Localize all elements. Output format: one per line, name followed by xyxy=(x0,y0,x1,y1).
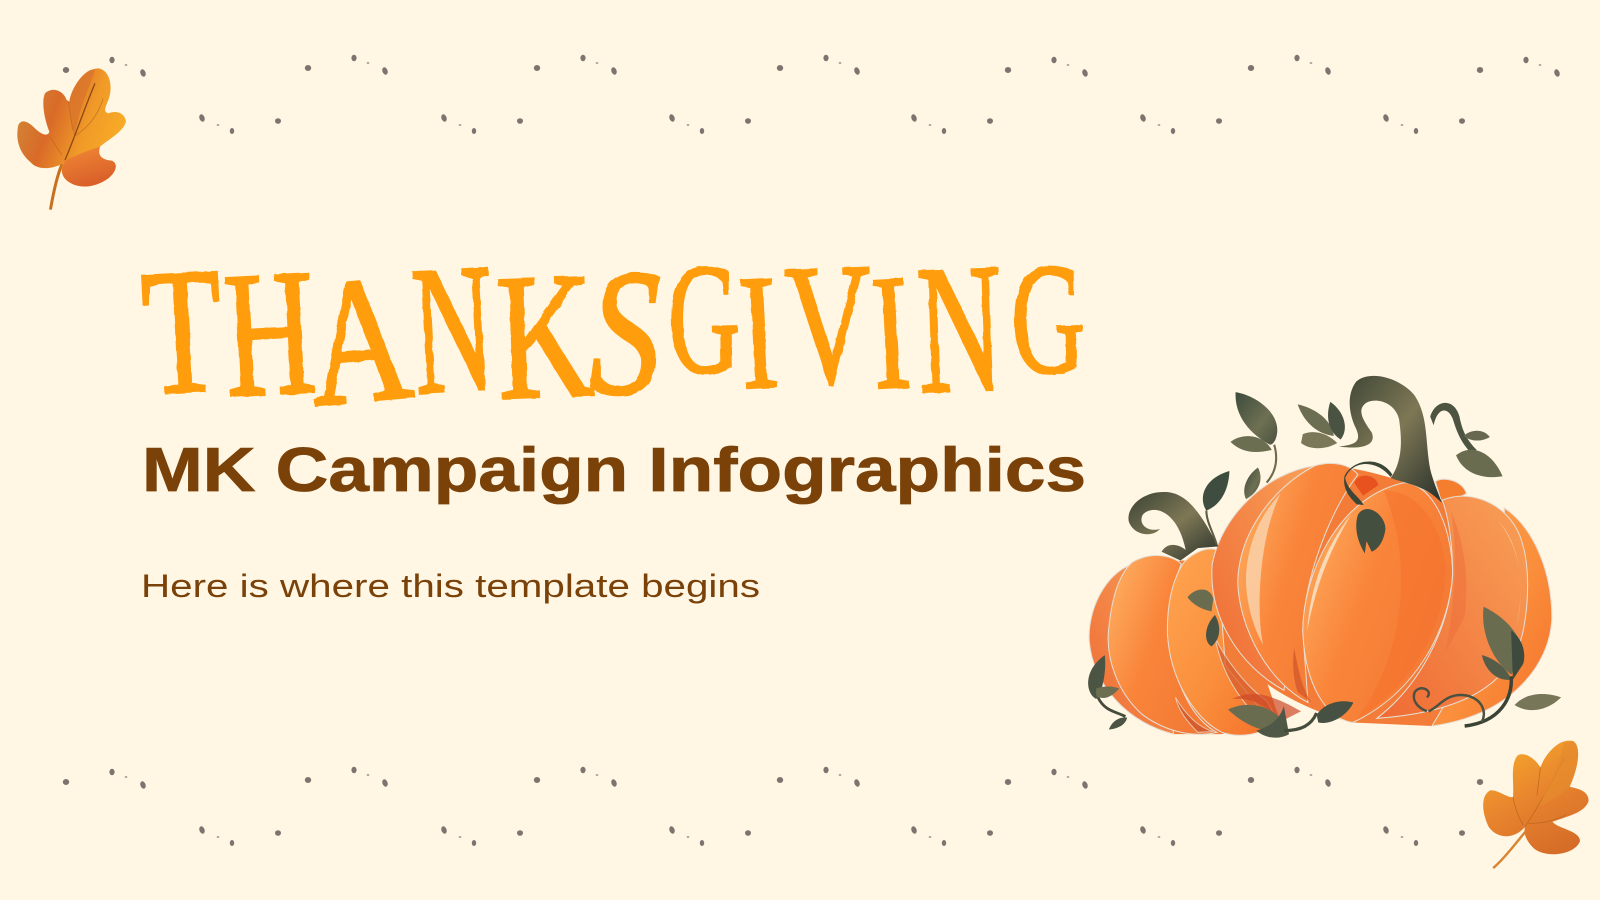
title: G xyxy=(667,230,741,408)
title: K xyxy=(493,236,597,438)
title: G xyxy=(1010,230,1087,407)
big pumpkin xyxy=(1212,463,1552,726)
subtitle: MK Campaign Infographics xyxy=(142,436,1086,505)
title: A xyxy=(300,236,418,444)
title: N xyxy=(914,227,1006,433)
small stem xyxy=(1128,492,1218,560)
title: I xyxy=(735,241,782,424)
small pumpkin xyxy=(1089,549,1280,735)
icon: autumn leaf bottom right xyxy=(1483,740,1589,869)
icon: pumpkins xyxy=(1088,376,1561,738)
title: H xyxy=(220,232,320,436)
pumpkin leaves and vines xyxy=(1088,392,1561,738)
icon: autumn leaf top left xyxy=(17,68,126,210)
tagline: Here is where this template begins xyxy=(141,568,760,604)
big stem xyxy=(1339,376,1477,505)
title: T xyxy=(138,229,227,433)
title: N xyxy=(407,226,499,433)
title: S xyxy=(590,232,660,432)
title: I xyxy=(867,241,914,424)
title: V xyxy=(783,228,875,422)
